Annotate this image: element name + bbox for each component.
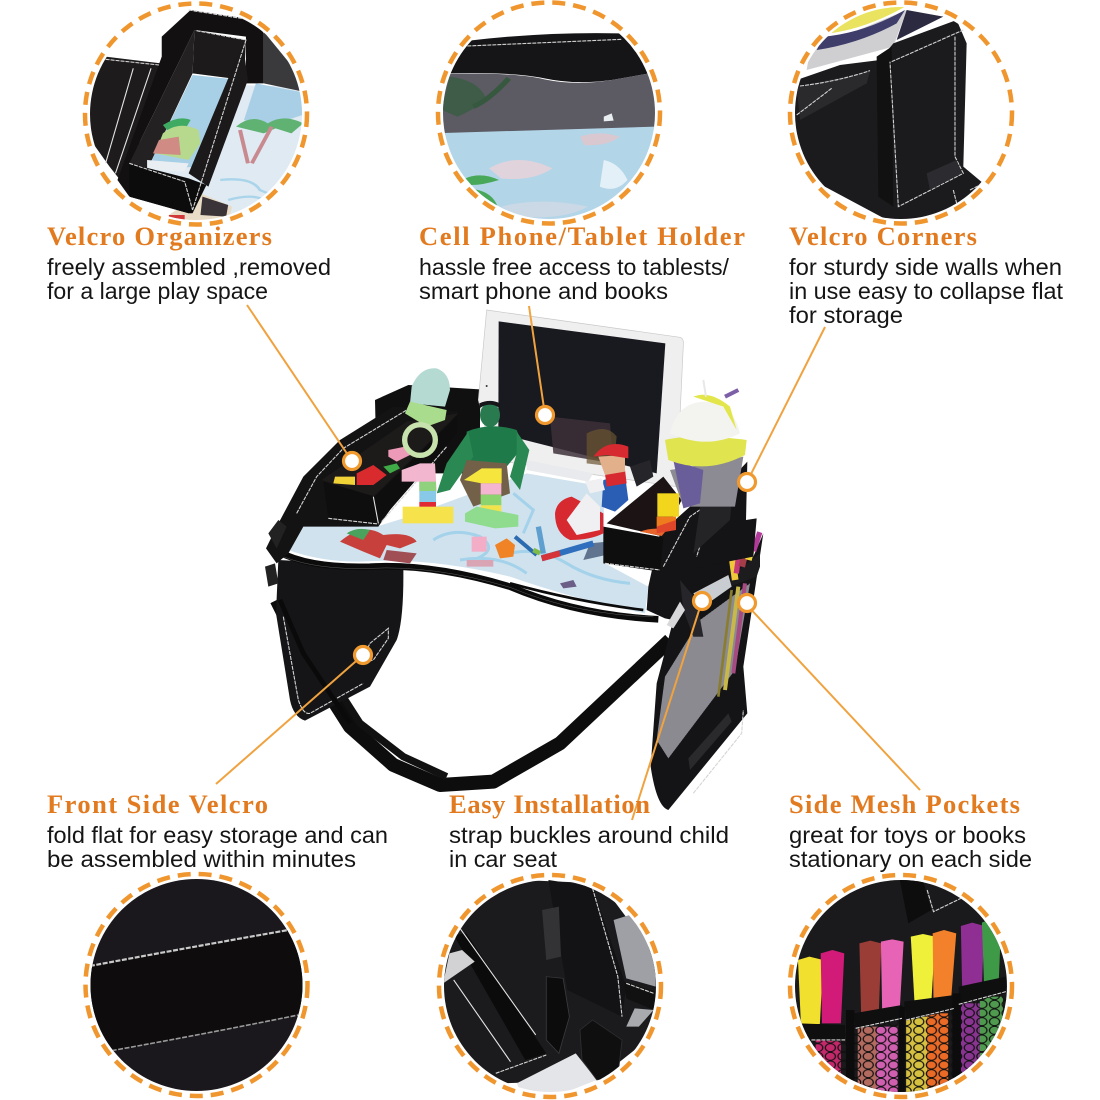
tablet [478,310,683,487]
callout: velcro organizers: Velcro Organizers [47,221,272,251]
callout: velcro corners: for sturdy side walls when [789,254,1062,280]
callout: front side velcro: fold flat for easy storage and can [47,822,388,848]
back wall [375,385,480,473]
pocket bands [799,977,1006,1097]
callout: cell phone tablet holder [419,221,745,304]
tray front rim [278,552,658,619]
building block tower: pink one [402,463,453,523]
left flap [276,560,403,723]
marker: front side velcro [354,646,372,664]
callout: easy installation: in car seat [449,846,558,872]
buckle and pen card [265,520,732,637]
callout: velcro organizers [47,221,331,304]
marker: organizers [344,452,360,470]
teether bottle [405,368,450,455]
pens [798,920,1000,1024]
callout: easy installation [449,789,729,872]
callout: front side velcro: Front Side Velcro [47,789,268,819]
callout: side mesh pockets: great for toys or books [789,822,1026,848]
left wall and organizer [266,407,458,563]
callout: side mesh pockets [789,789,1032,872]
marker: side pockets [738,594,756,612]
callout: front side velcro [47,789,388,872]
mario kart figure [555,444,653,540]
callout: cell phone tablet holder: hassle free access to tablests/ [419,254,730,280]
tray play surface [288,473,648,613]
callout: velcro organizers: for a large play space [47,278,268,304]
callout: easy installation: Easy Installation [449,789,650,819]
leader line: tablet holder [529,306,545,415]
marker: tablet holder [536,406,554,424]
marker: corners [738,474,756,490]
photo circle: colored pens in mesh [782,870,1018,1100]
marker: easy installation [694,592,710,610]
photo circle: cell phone holder [436,0,662,226]
leader line: corners [747,327,825,482]
callout: side mesh pockets: Side Mesh Pockets [789,789,1020,819]
sippy cup [665,380,747,508]
callout: velcro organizers: freely assembled ,removed [47,254,331,280]
callout: cell phone tablet holder: smart phone and books [419,278,668,304]
hulk figure [437,401,529,507]
callout: side mesh pockets: stationary on each side [789,846,1032,872]
building block tower: green one [464,468,518,528]
leader line: side pockets [745,603,920,790]
mesh pen bottoms [807,995,1006,1092]
leader line: organizers [247,305,352,461]
photo circle: velcro organizers [82,1,310,227]
leader lines [216,305,920,820]
photo circle: velcro corners [780,0,1020,233]
callout: velcro corners: Velcro Corners [789,221,977,251]
photo circle: front fabric stitching [75,870,315,1100]
photo circle: buckle strap detail [436,872,664,1100]
side mesh pocket [651,531,763,810]
strap [277,600,670,785]
callout: easy installation: strap buckles around child [449,822,729,848]
callout: velcro corners [789,221,1064,328]
small toys on tray [472,527,593,558]
leader line: front side velcro [216,655,363,784]
right wall and organizer [603,462,757,618]
callout: cell phone tablet holder: Cell Phone/Tablet Holder [419,221,745,251]
callout: velcro corners: for storage [789,302,903,328]
leader line: easy installation [632,601,702,820]
callout: velcro corners: in use easy to collapse flat [789,278,1064,304]
yellow blocks right [657,493,679,533]
callout: front side velcro: be assembled within minutes [47,846,356,872]
product photo: travel tray with toys [265,310,763,810]
